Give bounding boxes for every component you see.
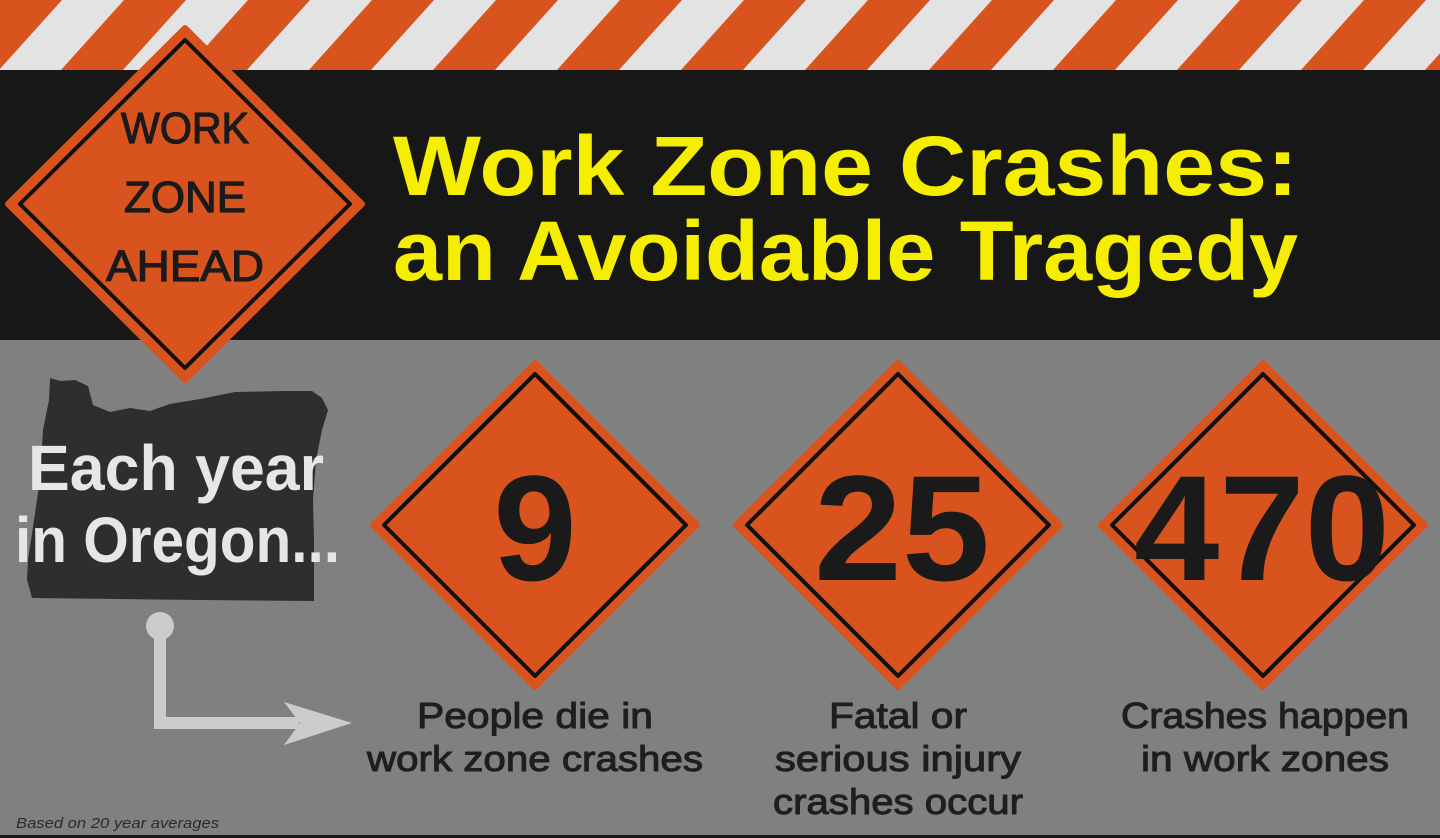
icon: Oregon map	[27, 378, 328, 601]
text: Each year in Oregon: Each year	[28, 432, 324, 504]
caption: people die: work zone crashes	[366, 738, 703, 779]
icon: work zone ahead sign: WORK	[121, 104, 249, 153]
caption: fatal or serious	[773, 695, 1023, 822]
title: an Avoidable Tragedy	[393, 204, 1298, 298]
caption: fatal or serious: crashes occur	[773, 781, 1023, 822]
icon: work zone ahead sign: AHEAD	[106, 242, 264, 291]
caption: people die	[366, 695, 703, 779]
caption: fatal or serious: Fatal or	[829, 695, 967, 736]
stat sign: 9: 9	[493, 444, 577, 612]
caption: crashes happen: in work zones	[1141, 738, 1389, 779]
text: Each year in Oregon: in Oregon...	[15, 504, 340, 576]
icon: work zone ahead sign: ZONE	[124, 173, 246, 222]
caption: people die: People die in	[417, 695, 653, 736]
stripe band	[0, 0, 1440, 70]
title: Work Zone Crashes:	[393, 119, 1298, 213]
text: Each year in Oregon	[15, 432, 340, 576]
stat sign: 470	[1101, 363, 1425, 687]
caption: fatal or serious: serious injury	[775, 738, 1021, 779]
caption: crashes happen: Crashes happen	[1121, 695, 1409, 736]
icon: work zone ahead sign	[8, 28, 362, 380]
black header band	[0, 70, 1440, 340]
stat sign: 25: 25	[814, 444, 990, 612]
arrow	[146, 612, 352, 745]
stat sign: 470: 470	[1134, 444, 1390, 612]
title	[393, 119, 1298, 298]
stat sign: 25	[736, 363, 1060, 687]
caption: crashes happen	[1121, 695, 1409, 779]
footnote: Based on 20 year averages	[16, 815, 220, 832]
stat sign: 9	[373, 363, 697, 687]
